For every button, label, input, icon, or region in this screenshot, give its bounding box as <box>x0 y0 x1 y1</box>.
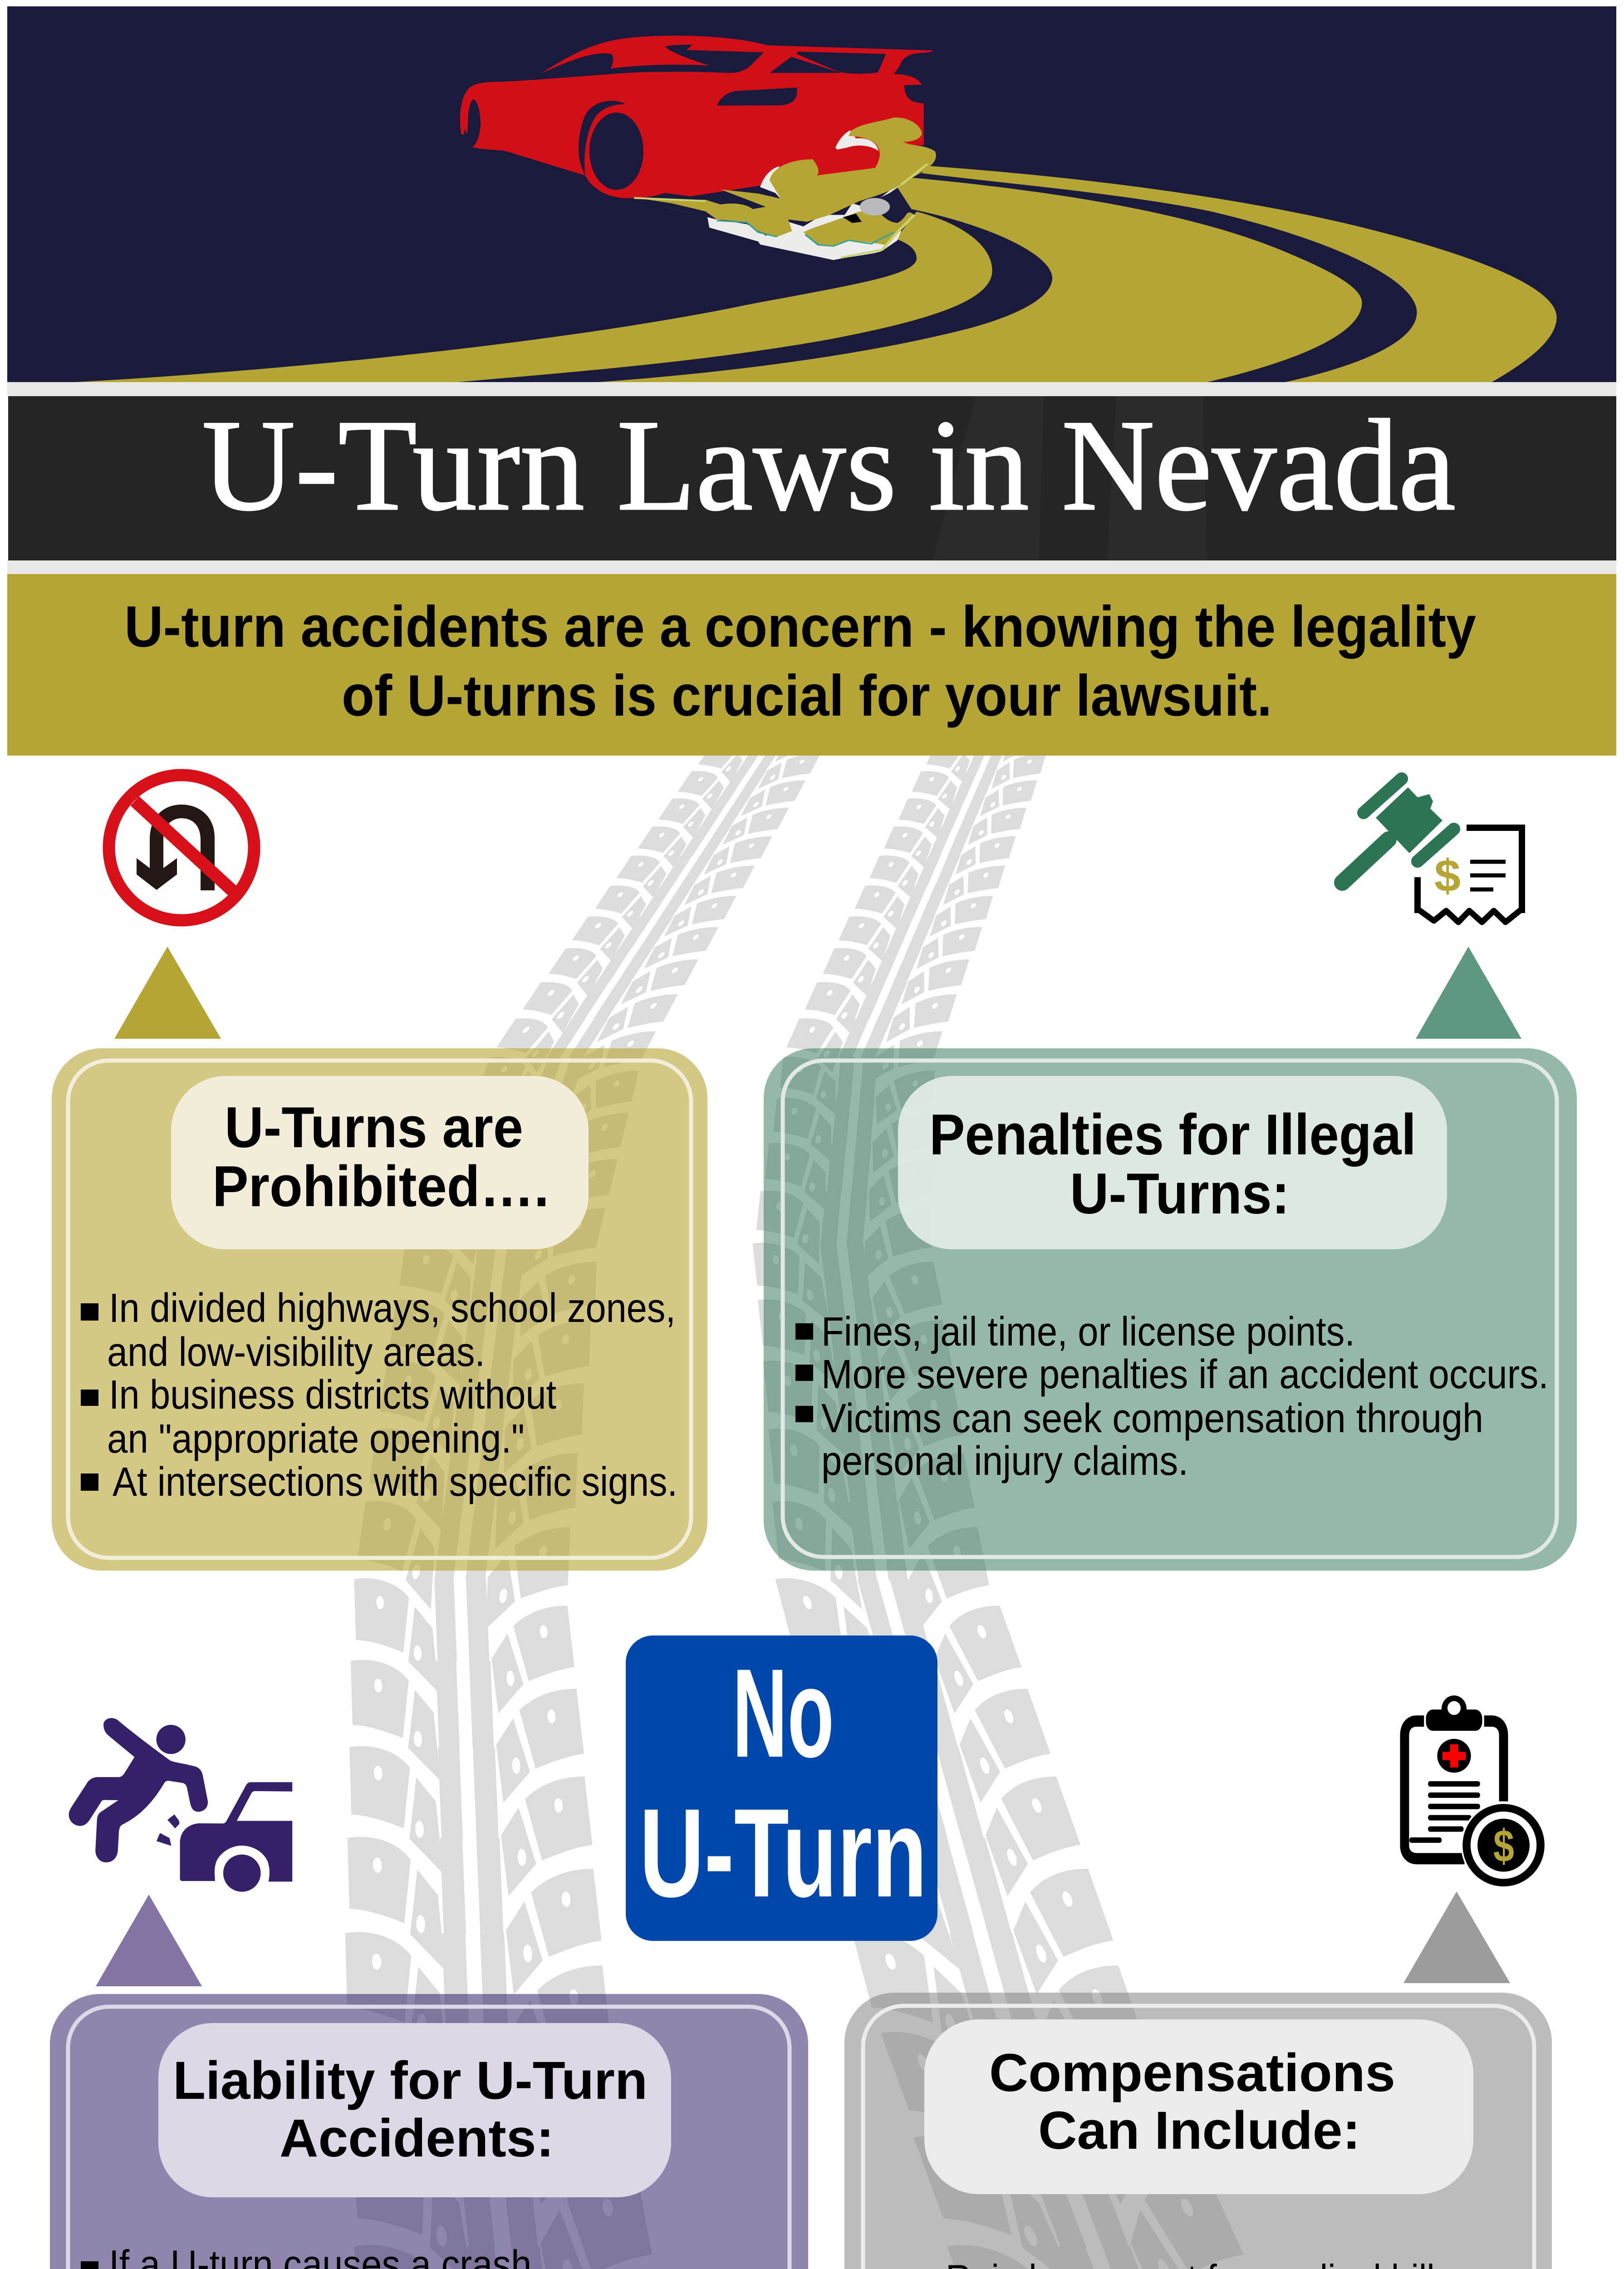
heading pill: Penalties for Illegal <box>929 1102 1416 1167</box>
panel: Liability for U-Turn Accidents <box>50 1994 808 2269</box>
heading pill <box>158 2023 671 2197</box>
subtitle band <box>7 574 1616 756</box>
icon: medical clipboard with coin <box>1404 1695 1546 1889</box>
arrow: grey triangle <box>1403 1891 1510 1983</box>
title: U-Turn Laws in Nevada <box>202 393 1456 538</box>
tire tracks background <box>344 717 1506 2269</box>
bullet list <box>795 1309 1549 1484</box>
panel: U-Turns are Prohibited <box>52 1048 707 1571</box>
icon: gavel and receipt <box>1342 779 1522 922</box>
icon: gavel and receipt: $ <box>1434 850 1461 901</box>
icon: person hit by car <box>69 1718 292 1892</box>
road <box>73 166 1557 382</box>
bullet list: In divided highways, school zones, <box>109 1286 676 1331</box>
panel: Compensations Can Include <box>844 1993 1552 2269</box>
divider strip below title <box>7 560 1616 574</box>
heading pill <box>171 1076 589 1249</box>
top banner: car and road <box>7 6 1616 382</box>
heading pill: Compensations <box>989 2043 1395 2103</box>
subtitle band: of U-turns is crucial for your lawsuit. <box>342 663 1272 728</box>
bullet list: an "appropriate opening." <box>107 1416 525 1462</box>
arrow: purple triangle <box>96 1895 202 1986</box>
No U-Turn sign <box>626 1635 937 1941</box>
heading pill <box>898 1076 1447 1249</box>
subtitle band: U-turn accidents are a concern - knowing the legality <box>124 594 1476 659</box>
red car <box>460 36 936 260</box>
title band <box>8 393 1616 560</box>
icon: medical clipboard with coin: $ <box>1493 1821 1514 1871</box>
arrow: green triangle <box>1416 947 1521 1039</box>
panel: Penalties for Illegal U-Turns <box>764 1048 1577 1571</box>
bullet list: At intersections with specific signs. <box>113 1459 677 1505</box>
heading pill <box>924 2019 1473 2194</box>
No U-Turn sign: U-Turn <box>639 1782 927 1923</box>
heading pill: Prohibited…. <box>212 1154 549 1218</box>
bullet list: personal injury claims. <box>821 1439 1188 1484</box>
bullet list: and low-visibility areas. <box>107 1330 485 1375</box>
bullet list: Victims can seek compensation through <box>821 1396 1483 1441</box>
tire smoke <box>634 118 936 260</box>
bullet list: In business districts without <box>109 1372 556 1418</box>
heading pill: Can Include: <box>1038 2101 1360 2161</box>
icon: no U-turn sign <box>109 775 254 920</box>
heading pill: U-Turns are <box>225 1095 523 1159</box>
arrow: gold triangle <box>114 947 221 1039</box>
bullet list <box>81 1286 677 1505</box>
heading pill: Liability for U-Turn <box>173 2051 648 2111</box>
heading pill: U-Turns: <box>1070 1161 1290 1226</box>
No U-Turn sign: No <box>732 1642 834 1783</box>
heading pill: Accidents: <box>280 2108 554 2168</box>
divider strip above title <box>7 382 1616 396</box>
bullet list: Fines, jail time, or license points. <box>821 1309 1355 1355</box>
bullet list: More severe penalties if an accident occurs. <box>821 1352 1549 1397</box>
bullet list <box>81 2242 780 2269</box>
